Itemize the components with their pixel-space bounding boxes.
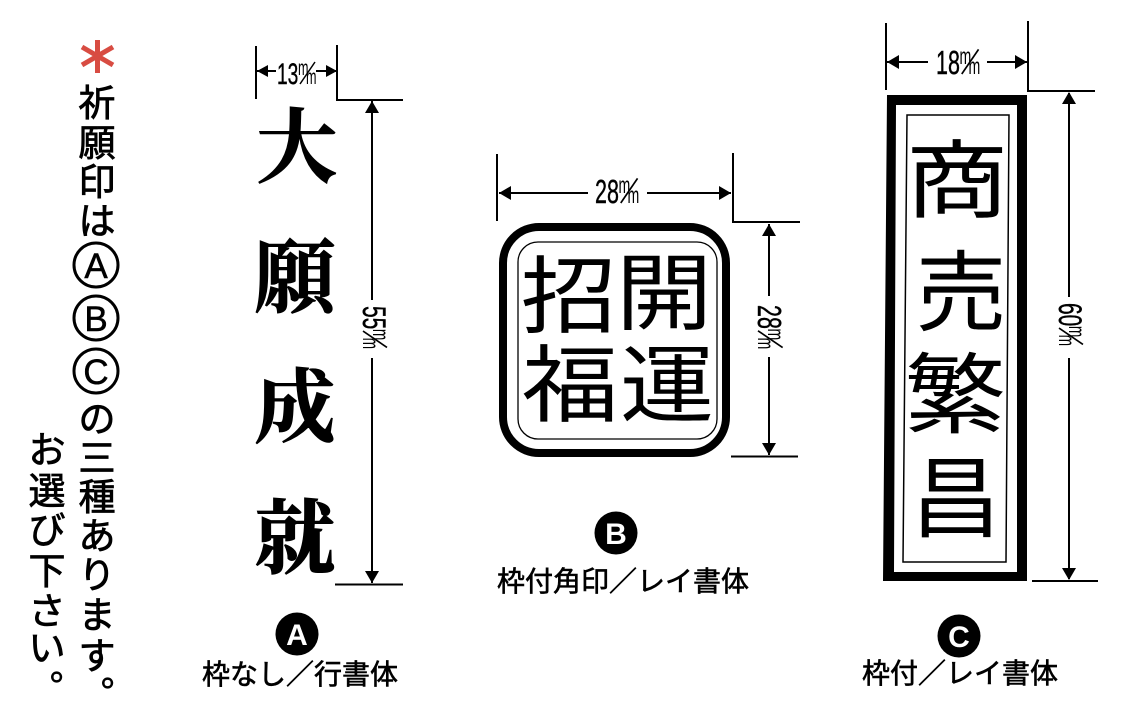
stamp text: 開運招福 (521, 248, 714, 434)
dimension: width 18 (886, 21, 1095, 91)
text block: vertical note, second column: い (28, 628, 66, 669)
text block: vertical note, first column: 種 (78, 477, 116, 518)
dimension: width 28: m (619, 172, 630, 199)
text block: vertical note, first column: 印 (78, 162, 116, 203)
dimension: width 13 (256, 45, 403, 100)
stamp frame inner (903, 115, 1009, 562)
stamp text: 開運招福: 運 (620, 339, 714, 433)
icon: circled B: B (84, 300, 108, 339)
text block: vertical note, first column: 三 (78, 438, 116, 479)
stamp text: 大願成就 (254, 104, 339, 585)
dimension: width 18: 18 (936, 43, 960, 81)
panel: stamp C (862, 21, 1098, 689)
text block: vertical note, second column: さ (28, 591, 66, 632)
stamp text: 商売繁昌: 繁 (904, 347, 1006, 445)
dimension: width 18: m (968, 53, 980, 80)
stamp text: 大願成就: 大 (256, 104, 338, 194)
dimension: width 18: m (960, 43, 971, 70)
stamp text: 大願成就: 願 (254, 234, 339, 324)
text block: vertical note, first column: は (78, 201, 116, 242)
text block: vertical note, first column: す (78, 636, 116, 677)
text block: vertical note, second column: 選 (28, 471, 66, 512)
icon: red asterisk (82, 40, 113, 73)
text block: vertical note, first column: ま (78, 595, 116, 636)
icon: circled C (74, 349, 118, 393)
text block: vertical note, first column: 祈 (78, 83, 116, 124)
dimension: width 28: 28 (595, 172, 619, 210)
dimension: height 55 (335, 101, 403, 584)
dimension: width 28: m (627, 182, 639, 209)
icon: circled C: C (83, 353, 109, 392)
dimension: height 55: m (368, 329, 393, 340)
badge B (594, 512, 638, 554)
caption B: 枠付角印／レイ書体 (497, 566, 749, 597)
dimension: height 28: m (762, 329, 789, 340)
stamp frame inner (518, 242, 717, 439)
icon: circled B (74, 296, 118, 340)
panel: stamp B (497, 153, 800, 597)
badge C: C (948, 621, 970, 654)
stamp frame outer (883, 95, 1027, 581)
text block: vertical note, second column (28, 430, 84, 688)
panel: stamp A (202, 45, 403, 690)
text block: vertical note, first column: の (78, 399, 116, 440)
text block: vertical note, second column: 。 (50, 650, 84, 688)
dimension: width 13: m (298, 56, 308, 80)
dimension: height 28: 28 (751, 305, 789, 329)
dimension: width 13: m (306, 65, 316, 89)
dimension: height 55: m (358, 338, 384, 349)
caption A: 枠なし／行書体 (202, 659, 398, 690)
text block: vertical note, first column: あ (78, 516, 116, 557)
caption C: 枠付／レイ書体 (862, 658, 1058, 689)
stamp text: 開運招福: 招 (521, 251, 617, 345)
badge B: B (605, 518, 627, 551)
stamp text: 開運招福: 開 (616, 248, 712, 342)
badge A (276, 612, 318, 656)
stamp frame outer (503, 227, 726, 453)
badge A: A (286, 619, 308, 652)
dimension: height 60: 60 (1052, 303, 1089, 326)
text block: vertical note, first column (74, 83, 135, 694)
text block: vertical note, second column: 下 (28, 551, 66, 592)
stamp text: 大願成就: 成 (254, 364, 336, 454)
stamp text: 商売繁昌: 売 (916, 244, 1006, 343)
text block: vertical note, first column: り (78, 555, 116, 596)
stamp text: 大願成就: 就 (254, 495, 336, 585)
dimension: width 28 (497, 153, 800, 222)
stamp text: 商売繁昌: 商 (905, 135, 1009, 230)
dimension: height 60: m (1054, 335, 1080, 346)
icon: circled A: A (84, 247, 108, 286)
stamp text: 商売繁昌 (904, 135, 1009, 549)
stamp text: 開運招福: 福 (522, 340, 618, 434)
dimension: height 55: 55 (356, 306, 393, 329)
dimension: height 60: m (1064, 326, 1089, 337)
text block: vertical note, first column: 。 (101, 656, 135, 694)
dimension: height 28: m (752, 337, 779, 349)
badge C (938, 614, 980, 658)
text block: vertical note, first column: 願 (78, 123, 116, 164)
dimension: height 60 (1032, 92, 1098, 581)
stamp text: 商売繁昌: 昌 (911, 451, 1001, 549)
dimension: width 13: 13 (277, 58, 298, 91)
dimension: height 28 (731, 224, 798, 456)
text block: vertical note, second column: び (28, 510, 66, 551)
text block: vertical note, second column: お (28, 430, 66, 471)
icon: circled A (74, 243, 118, 287)
